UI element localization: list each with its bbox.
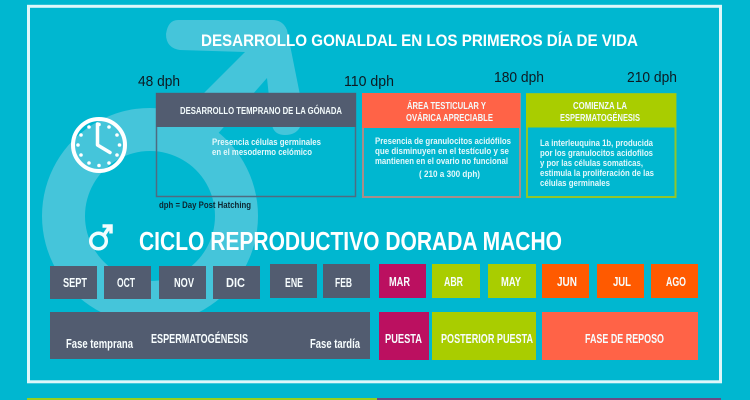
title: DESARROLLO GONALDAL EN LOS PRIMEROS DÍA DE VIDA: [201, 31, 638, 50]
timeline labels: [138, 69, 677, 90]
panel: comienza la espermatogenesis: [526, 94, 676, 197]
month row: DIC: [226, 275, 246, 290]
phase row: Fase tardía: [310, 336, 361, 351]
month row: ENE: [285, 275, 303, 290]
month row: JUN: [557, 274, 577, 289]
icon: male symbol: [91, 226, 111, 249]
month row: ABR: [444, 274, 463, 289]
footnote: dph = Day Post Hatching: [159, 200, 251, 211]
panel: comienza la espermatogenesis: La interleuquina 1b, producida: [540, 138, 654, 148]
panel: area testicular: que disminuyen en el testículo y se: [375, 146, 509, 156]
month row: MAR: [389, 274, 410, 289]
panel: comienza la espermatogenesis: estimula la proliferación de las: [540, 168, 654, 178]
month row: [50, 264, 698, 299]
panel: desarrollo temprano: en el mesodermo celómico: [212, 147, 312, 157]
panel: area testicular: Presencia de granulocitos acidófilos: [375, 136, 511, 146]
bottom strip: [27, 398, 721, 400]
timeline labels: 110 dph: [344, 73, 394, 90]
panel: area testicular: mantienen en el ovario no funcional: [375, 156, 508, 166]
phase row: ESPERMATOGÉNESIS: [151, 331, 248, 346]
phase row: [50, 312, 698, 360]
panel: comienza la espermatogenesis: y por las células somaticas,: [540, 158, 643, 168]
heading: ciclo reproductivo: CICLO REPRODUCTIVO DORADA MACHO: [139, 228, 562, 256]
phase row: PUESTA: [385, 331, 422, 346]
phase row: FASE DE REPOSO: [585, 331, 664, 346]
month row: FEB: [335, 275, 352, 290]
icon: clock: [73, 119, 125, 171]
month row: MAY: [501, 274, 521, 289]
panel: comienza la espermatogenesis: células germinales: [540, 178, 610, 188]
month row: AGO: [666, 274, 686, 289]
month row: OCT: [117, 275, 135, 290]
timeline labels: 48 dph: [138, 73, 180, 90]
panel: area testicular: ( 210 a 300 dph): [419, 169, 480, 179]
panel: area testicular: [362, 93, 520, 197]
phase row: POSTERIOR PUESTA: [441, 331, 533, 346]
timeline labels: 210 dph: [627, 69, 677, 86]
panel: area testicular: ÁREA TESTICULAR Y: [407, 99, 486, 112]
timeline labels: 180 dph: [494, 69, 544, 86]
month row: JUL: [613, 274, 631, 289]
panel: comienza la espermatogenesis: ESPERMATOGÉNESIS: [560, 111, 640, 124]
background male symbol: [42, 20, 303, 324]
month row: SEPT: [63, 275, 87, 290]
panel: desarrollo temprano: Presencia células germinales: [212, 137, 321, 147]
panel: desarrollo temprano: DESARROLLO TEMPRANO DE LA GÓNADA: [180, 104, 342, 117]
month row: NOV: [174, 275, 194, 290]
phase row: Fase temprana: [66, 336, 134, 351]
panel: desarrollo temprano: [156, 93, 356, 196]
panel: comienza la espermatogenesis: por los granulocitos acidofilos: [540, 148, 653, 158]
panel: comienza la espermatogenesis: COMIENZA LA: [573, 101, 627, 112]
panel: area testicular: OVÁRICA APRECIABLE: [406, 111, 493, 124]
